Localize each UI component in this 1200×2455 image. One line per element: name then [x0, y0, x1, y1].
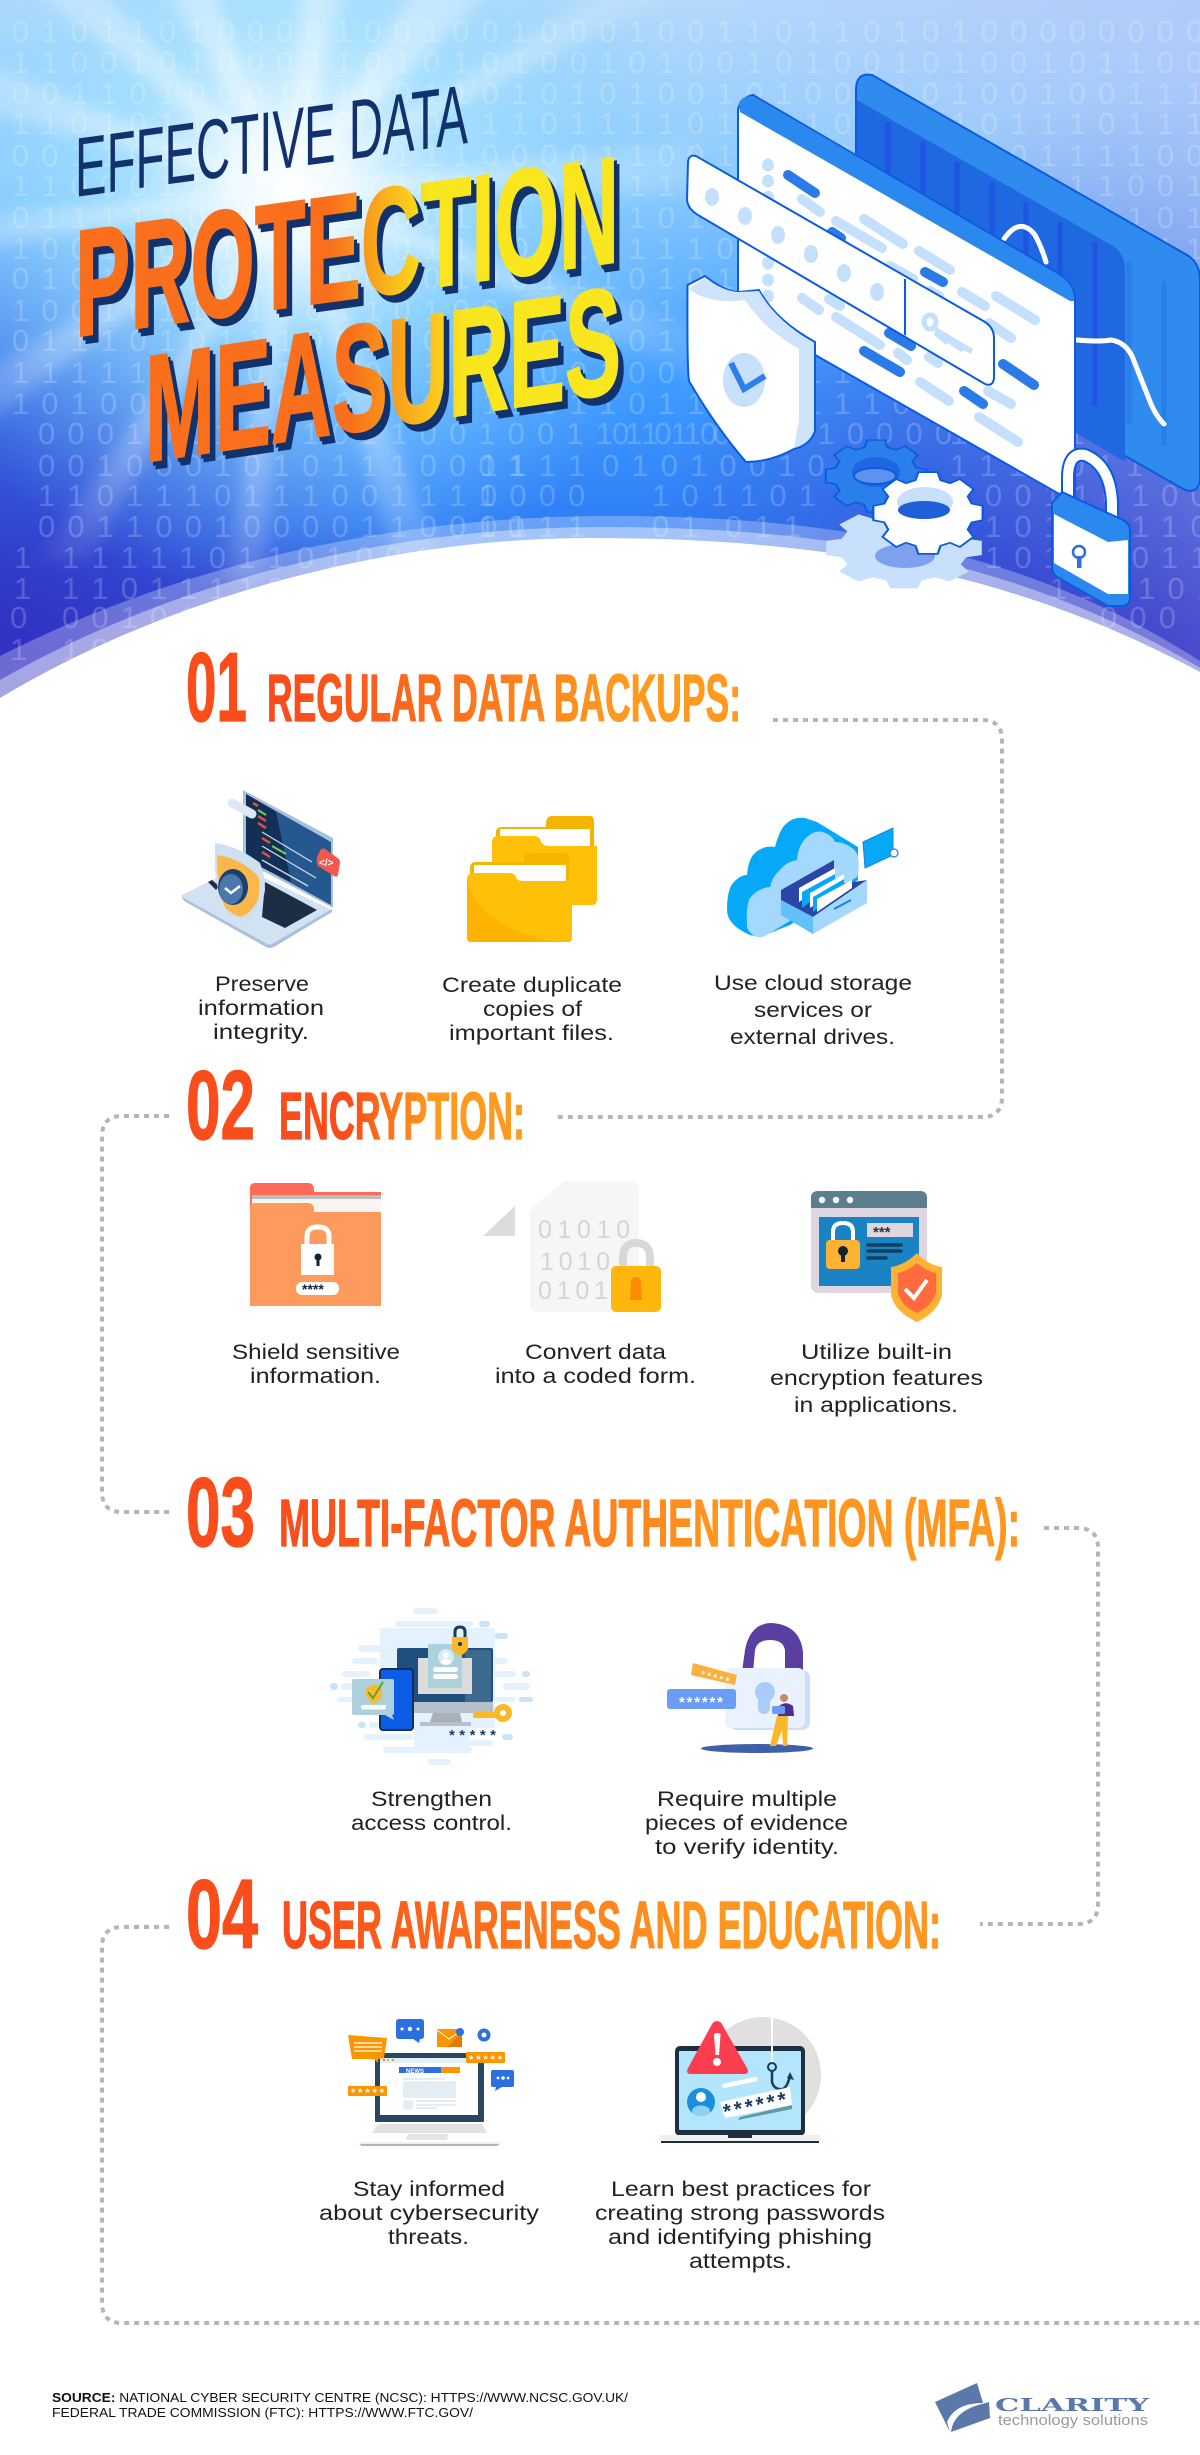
header background: 0 0 0 — [1100, 600, 1178, 635]
address bar and key panel — [687, 156, 994, 385]
header background: 0 1 0 1 0 0 1 0 — [602, 448, 826, 483]
header background: 0 0 1 0 0 0 1 0 1 0 1 1 1 0 0 0 1 — [38, 448, 527, 483]
text: stay informed: threats. — [388, 2226, 469, 2249]
section 02 connector — [102, 1116, 170, 1512]
text: create duplicate copies: Create duplicate — [442, 974, 622, 997]
title: protection — [75, 124, 624, 377]
title: measures: MEASURES — [148, 259, 624, 498]
source note: SOURCE: NATIONAL CYBER SECURITY CENTRE (NCSC): HTTPS://WWW.NCSC.GOV.UK/ — [52, 2391, 629, 2405]
text: learn best practices: Learn best practices for — [611, 2178, 871, 2201]
text: convert data into coded form: Convert data — [525, 1341, 666, 1364]
text: learn best practices: attempts. — [689, 2250, 792, 2273]
header background — [0, 0, 1200, 720]
icon: coded document with lock: 0 1 0 1 — [538, 1277, 608, 1305]
header background: 1 1 1 1 1 0 1 1 0 1 0 0 1 1 1 1 0 — [62, 540, 551, 575]
icon: news monitor: ***** — [469, 2054, 503, 2066]
icon: padlock with person: ****** — [679, 1694, 723, 1711]
section 02 heading: 02 — [186, 1050, 255, 1160]
source note: FEDERAL TRADE COMMISSION (FTC): HTTPS://WWW.FTC.GOV/ — [52, 2406, 474, 2420]
header background: 1 1 0 1 1 1 0 1 1 1 0 0 1 1 1 1 — [38, 478, 497, 513]
text: preserve information integrity: information — [198, 997, 324, 1020]
icon: coded document with lock — [483, 1181, 661, 1312]
text: strengthen access control — [351, 1788, 512, 1835]
header background: 1 — [14, 571, 33, 606]
icon: duplicate folders — [467, 816, 597, 942]
icon: access control devices: ***** — [449, 1727, 496, 1744]
icon: phishing laptop: ****** — [721, 2088, 789, 2124]
section 02 heading — [186, 1050, 525, 1160]
front white panel — [738, 95, 1075, 503]
shield — [687, 276, 815, 462]
section 02 heading: ENCRYPTION: — [279, 1079, 525, 1154]
text: shield sensitive information — [232, 1341, 400, 1388]
text: use cloud storage: Use cloud storage — [714, 972, 912, 995]
back blue panel — [856, 75, 1200, 491]
text: require multiple pieces: pieces of evidence — [645, 1812, 848, 1835]
logo: clarity technology solutions — [935, 2383, 1151, 2432]
white gear — [873, 472, 983, 554]
text: require multiple pieces — [645, 1788, 848, 1859]
section 03 heading: 03 — [186, 1457, 255, 1567]
text: strengthen access control: access control. — [351, 1812, 512, 1835]
text: shield sensitive information: Shield sensitive — [232, 1341, 400, 1364]
header background: 0 0 1 0 1 0 — [62, 600, 228, 635]
icon: padlock with person — [667, 1623, 813, 1753]
text: learn best practices — [595, 2178, 885, 2273]
text: use cloud storage: external drives. — [730, 1026, 895, 1049]
text: preserve information integrity — [198, 973, 324, 1044]
text: stay informed: about cybersecurity — [319, 2202, 540, 2225]
icon: browser with lock and shield: *** — [873, 1224, 891, 1241]
header background: 1 0 1 1 0 1 — [652, 478, 818, 513]
header background: 0 1 — [652, 509, 700, 544]
text: preserve information integrity: integrity. — [213, 1021, 309, 1044]
text: shield sensitive information: information. — [250, 1365, 381, 1388]
icon: news monitor: NEWS — [406, 2069, 424, 2075]
section 01 connector — [554, 720, 1002, 1117]
text: utilize built-in encryption: in applications. — [794, 1394, 958, 1417]
title: protection: PROTECTION — [80, 132, 624, 377]
header background: 1 1 1 1 — [480, 448, 587, 483]
section 01 heading: REGULAR DATA BACKUPS: — [267, 661, 741, 736]
text: require multiple pieces: Require multiple — [657, 1788, 837, 1811]
icon: locked orange folder: **** — [302, 1281, 324, 1297]
icon: coded document with lock: 0 1 0 1 0 — [538, 1216, 630, 1244]
title: measures: MEASURES — [145, 255, 621, 495]
text: utilize built-in encryption — [770, 1341, 983, 1417]
section 03 heading — [186, 1457, 1020, 1567]
dark gear — [826, 440, 926, 512]
header background: 0 1 1 1 — [480, 509, 587, 544]
text: create duplicate copies: important files. — [449, 1022, 614, 1045]
icon: news monitor — [348, 2019, 514, 2146]
header background: 1 0 — [62, 632, 110, 667]
text: convert data into coded form — [495, 1341, 696, 1388]
header background: 0 0 0 1 0 1 1 1 0 1 0 1 1 0 0 1 0 0 1 1 1 0 1 0 — [38, 416, 732, 451]
title: measures: MEASURES — [150, 263, 627, 502]
text: learn best practices: creating strong passwords — [595, 2202, 885, 2225]
section 01 heading — [186, 632, 741, 742]
text: utilize built-in encryption: encryption features — [770, 1367, 983, 1390]
section 04 heading: 04 — [186, 1859, 258, 1969]
header background: 0 0 0 0 — [480, 478, 587, 513]
illustration: data security panels — [687, 75, 1200, 606]
header background: 1 1 0 1 1 1 1 0 0 0 — [62, 571, 345, 606]
header background: 0 — [10, 600, 29, 635]
text: create duplicate copies: copies of — [483, 998, 582, 1021]
section 03 connector — [980, 1528, 1098, 1924]
title: protection: PROTECTION — [75, 125, 619, 369]
white curve lines — [1004, 226, 1164, 424]
section 04 connector — [102, 1927, 1200, 2323]
header background: 1 — [14, 540, 33, 575]
text: utilize built-in encryption: Utilize built-in — [801, 1341, 952, 1364]
white content background — [0, 538, 1200, 2455]
icon: access control devices — [330, 1608, 533, 1765]
icon: coded document with lock: 1 0 1 0 — [540, 1248, 610, 1276]
title: effective data: EFFECTIVE DATA — [75, 68, 468, 216]
section 01 heading: 01 — [186, 632, 247, 742]
title: measures — [145, 255, 626, 503]
icon: laptop with shield: </> — [319, 858, 334, 869]
header background: 1 1 1 0 1 0 1 1 0 — [950, 416, 1200, 451]
text: convert data into coded form: into a coded form. — [495, 1365, 696, 1388]
icon: laptop with shield — [181, 790, 340, 948]
text: strengthen access control: Strengthen — [371, 1788, 492, 1811]
header background: 0 1 1 0 1 0 0 1 0 0 0 0 — [612, 416, 954, 451]
header background: 0 1 1 — [725, 509, 803, 544]
source note — [52, 2391, 629, 2420]
gears — [826, 440, 983, 588]
text: stay informed: Stay informed — [353, 2178, 505, 2201]
header background: 1 — [10, 632, 29, 667]
logo: clarity technology solutions: CLARITY — [995, 2395, 1151, 2416]
header background: 0 0 1 1 0 0 1 0 0 0 0 1 1 0 0 1 0 — [38, 509, 527, 544]
text: use cloud storage — [714, 972, 912, 1049]
logo: clarity technology solutions: technology solutions — [998, 2412, 1148, 2429]
section 04 heading — [186, 1859, 941, 1969]
text: require multiple pieces: to verify identity. — [655, 1836, 839, 1859]
icon: phishing laptop — [659, 2017, 821, 2143]
pale gear — [826, 508, 982, 588]
text: stay informed — [319, 2178, 540, 2249]
title: protection: PROTECTION — [78, 129, 622, 373]
text: create duplicate copies — [442, 974, 622, 1045]
text: use cloud storage: services or — [754, 999, 872, 1022]
padlock — [1052, 455, 1130, 606]
icon: padlock with person: ***** — [699, 1669, 730, 1687]
icon: locked orange folder — [250, 1183, 381, 1306]
text: preserve information integrity: Preserve — [215, 973, 309, 996]
icon: cloud storage — [727, 818, 898, 937]
icon: news monitor: ***** — [351, 2087, 385, 2099]
text: learn best practices: and identifying phishing — [608, 2226, 872, 2249]
icon: browser with lock and shield — [811, 1191, 942, 1322]
